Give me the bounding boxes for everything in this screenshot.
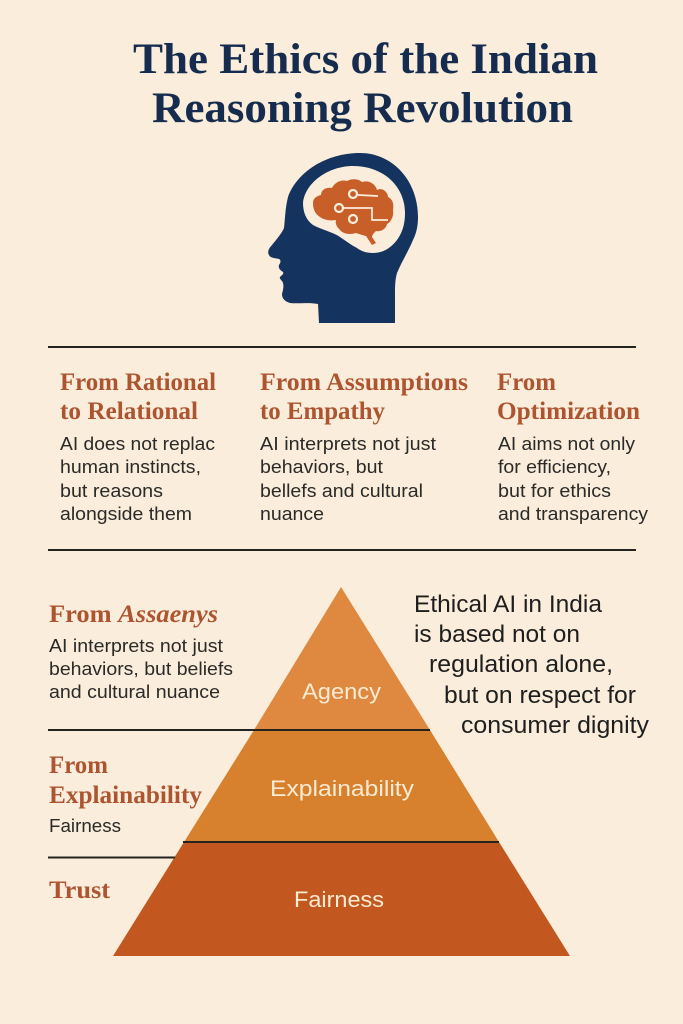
text block: from assaenys: AI interprets not just [49,635,223,656]
pyramid tier: fairness [113,842,570,956]
panel: from assumptions to empathy: AI interprets not just [260,433,436,454]
brain circuit traces [335,190,388,223]
panel: from optimization: and transparency [498,503,649,524]
panel: from optimization: AI aims not only [498,433,636,454]
panel: from rational to relational: From Rational [60,367,216,396]
panel: from rational to relational [60,367,216,524]
text block: trust: Trust [49,875,111,904]
pyramid tier: fairness: Fairness [294,887,384,912]
top rule [48,346,636,348]
panel: from optimization [497,367,649,524]
text block: from assaenys: behaviors, but beliefs [49,658,233,679]
callout: is based not on [414,621,580,648]
panel: from rational to relational: AI does not replac [60,433,215,454]
panel: from optimization: From [497,367,556,396]
panel: from optimization: Optimization [497,396,640,425]
panel: from rational to relational: but reasons [60,480,163,501]
pyramid chart [113,587,570,956]
brain [313,179,393,245]
callout: regulation alone, [429,651,613,678]
pyramid tier: explainability [184,730,499,842]
text block: from explainability [49,750,202,836]
title [133,36,598,132]
title: Reasoning Revolution [152,85,573,132]
text block: from assaenys [49,599,233,702]
text block: from explainability: Fairness [49,815,121,836]
panel: from assumptions to empathy: From Assumptions [260,367,468,396]
text block: from assaenys: and cultural nuance [49,681,220,702]
panel: from rational to relational: human instincts, [60,456,201,477]
panel: from assumptions to empathy: to Empathy [260,396,385,425]
pyramid tier: agency [254,587,430,730]
middle rule [48,549,636,551]
panel: from rational to relational: alongside them [60,503,192,524]
tier divider lines [48,729,499,858]
panel: from assumptions to empathy: nuance [260,503,324,524]
callout [414,591,650,739]
icon: head with circuit brain [268,153,418,323]
text block: from assaenys: From Assaenys [49,599,218,628]
head silhouette [268,153,418,323]
title: The Ethics of the Indian [133,36,598,83]
pyramid tier: explainability: Explainability [270,776,414,801]
callout: but on respect for [444,682,636,709]
panel: from optimization: for efficiency, [498,456,611,477]
callout: consumer dignity [461,712,650,739]
panel: from assumptions to empathy [260,367,468,524]
panel: from assumptions to empathy: behaviors, but [260,456,383,477]
panel: from optimization: but for ethics [498,480,611,501]
callout: Ethical AI in India [414,591,602,618]
pyramid tier: agency: Agency [302,679,381,704]
head cavity [303,166,405,253]
text block: from explainability: Explainability [49,780,202,809]
panel: from rational to relational: to Relational [60,396,198,425]
text block: from explainability: From [49,750,108,779]
panel: from assumptions to empathy: bellefs and cultural [260,480,423,501]
